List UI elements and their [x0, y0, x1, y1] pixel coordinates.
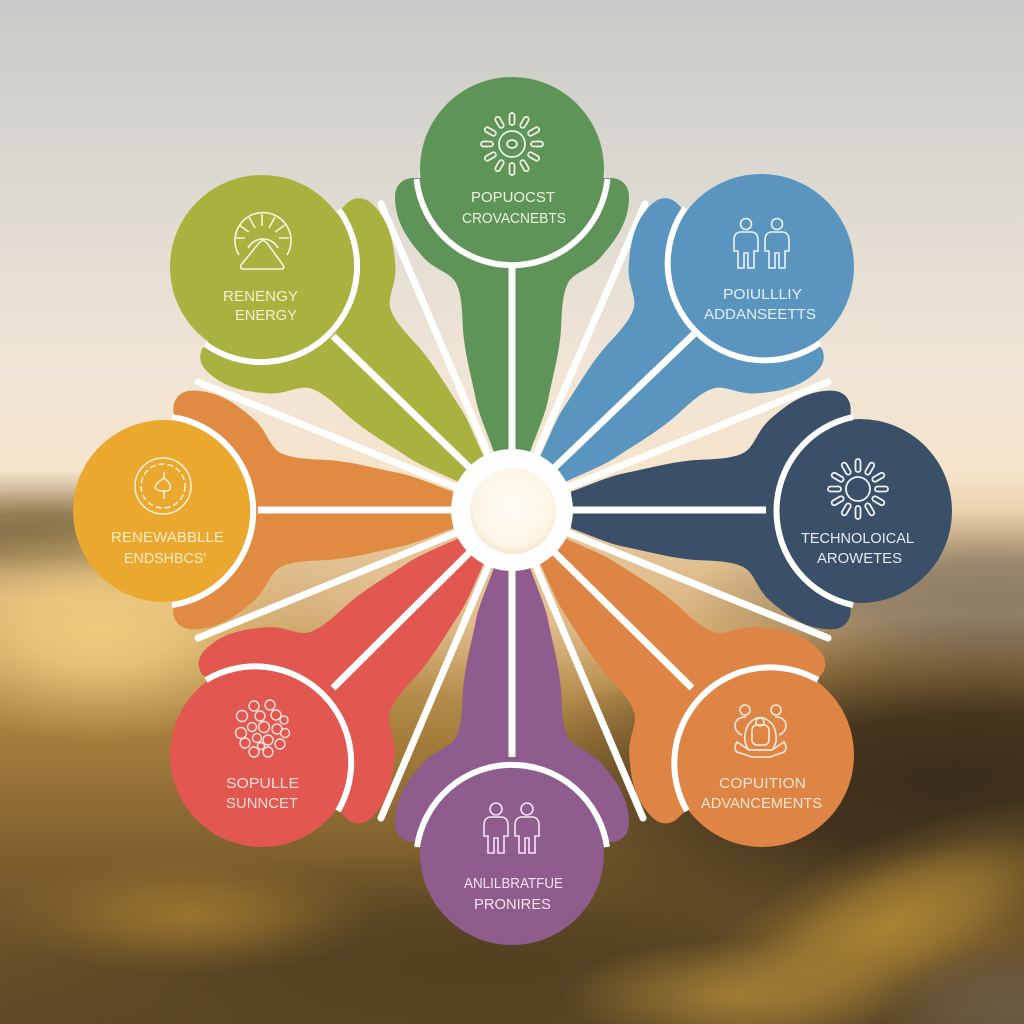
- panel: top green: [395, 77, 629, 455]
- panel: navy: [570, 391, 952, 629]
- panel: lower-right orange: [470, 468, 854, 847]
- petal: orange: [470, 468, 833, 831]
- stem: lime: [333, 336, 472, 470]
- label: red: [226, 775, 299, 812]
- label: blue: ADDANSEETTS: [704, 306, 816, 323]
- label: orange: [701, 775, 822, 812]
- icon: two people: [484, 803, 539, 853]
- panel: lime: [170, 175, 554, 552]
- label: red: SUNNCET: [226, 795, 298, 812]
- ring: orange: [674, 667, 818, 811]
- stem: green: [508, 265, 516, 455]
- label: purple: [464, 875, 563, 913]
- petal: red: [191, 468, 554, 831]
- label: red: SOPULLE: [226, 775, 299, 792]
- panel: blue: [470, 174, 854, 552]
- icon: two people: [734, 218, 789, 268]
- center hub: [451, 449, 573, 571]
- stem: orange-yellow: [258, 506, 454, 514]
- label: lime: RENENGY: [223, 288, 298, 305]
- stem: orange: [552, 550, 692, 688]
- label: yellow-orange: [111, 529, 224, 567]
- label: lime: [223, 288, 298, 324]
- stem: blue: [552, 334, 694, 470]
- ring: navy: [776, 417, 853, 605]
- petal: orange-yellow: [173, 391, 453, 629]
- icon: cell cluster: [236, 700, 290, 757]
- label: orange: ADVANCEMENTS: [701, 795, 822, 812]
- circle: red: [170, 663, 354, 847]
- circle: navy: [768, 419, 952, 603]
- circle: purple: [420, 761, 604, 945]
- petal: blue: [470, 191, 831, 552]
- stem: navy: [570, 506, 766, 514]
- ring: green: [416, 179, 608, 265]
- label: yellow-orange: ENDSHBCS': [124, 550, 206, 567]
- petal: navy: [571, 391, 851, 629]
- panel: red: [170, 468, 554, 847]
- stem: purple: [508, 565, 516, 757]
- label: green: POPUOCST: [471, 189, 555, 206]
- stem: red: [333, 550, 472, 688]
- ring: lime: [205, 210, 357, 362]
- ring: yellow-orange: [172, 417, 253, 605]
- label: lime: ENERGY: [235, 307, 297, 324]
- spokes: long white separators between petals: [198, 204, 828, 818]
- panel: yellow-orange: [73, 391, 454, 629]
- label: yellow-orange: RENEWABBLLE: [111, 529, 224, 546]
- label: blue: POIULLLIY: [723, 286, 802, 303]
- circle: lime: [170, 175, 354, 359]
- circle: green: [420, 77, 604, 261]
- icon: group with backpack: [735, 705, 786, 757]
- ring: purple: [417, 765, 607, 847]
- label: green: CROVACNEBTS: [462, 210, 566, 227]
- label: blue: [704, 286, 816, 323]
- label: orange: COPUITION: [719, 775, 806, 792]
- circle: orange: [670, 663, 854, 847]
- ring: red: [206, 666, 351, 811]
- panel: purple: [395, 565, 629, 945]
- icon: mountain under sun dome: [235, 213, 291, 269]
- ring: blue: [668, 208, 820, 360]
- circle: blue: [668, 174, 854, 360]
- icon: sun: [481, 113, 543, 175]
- label: navy: AROWETES: [817, 550, 902, 567]
- petal: green: [395, 178, 629, 452]
- petal: purple: [395, 568, 629, 842]
- icon: sun outline: [828, 459, 888, 519]
- label: green: [462, 189, 566, 227]
- circle: yellow-orange: [73, 420, 255, 602]
- icon: leaf in dotted ring: [135, 458, 191, 514]
- label: purple: ANLILBRATFUE: [464, 875, 563, 892]
- label: navy: [801, 530, 914, 567]
- label: purple: PRONIRES: [474, 896, 551, 913]
- label: navy: TECHNOLOICAL: [801, 530, 914, 547]
- petal: lime: [193, 191, 554, 552]
